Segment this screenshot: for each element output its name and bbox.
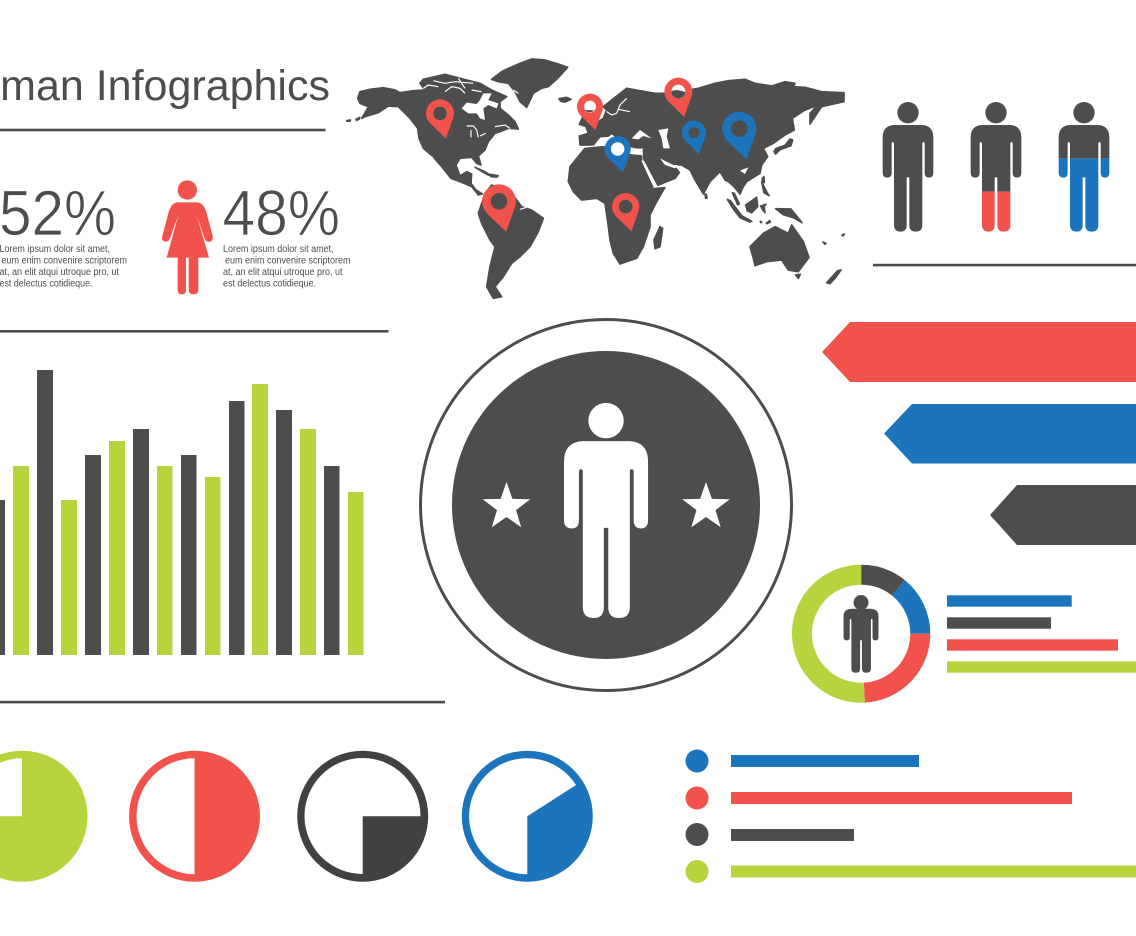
pin: South America [482, 184, 516, 232]
pin: North Africa [605, 136, 631, 172]
arrow: dark [990, 485, 1136, 545]
arrow: blue [884, 404, 1136, 464]
legend row: green [686, 860, 1136, 883]
pie: red [129, 751, 260, 882]
bar chart [0, 370, 364, 655]
text block: right description [223, 244, 350, 290]
legend row: red [686, 786, 1072, 810]
donut chart [802, 575, 920, 693]
pie: blue [462, 751, 593, 882]
pin: Europe [577, 94, 603, 130]
icon: man with blue lower body [1059, 102, 1109, 232]
pin: Russia [664, 78, 692, 117]
legend row: blue [686, 750, 919, 772]
world map [347, 59, 844, 298]
pin: Central Africa [612, 193, 639, 231]
stat: 48 percent [222, 177, 350, 290]
map seas [462, 93, 748, 187]
stat: 52 percent: 52% [0, 177, 116, 249]
map rivers and channels [423, 78, 667, 209]
text block: left description: at, an elit atqui utroque pro, ut [0, 267, 119, 278]
icons: three men [883, 102, 1109, 232]
text block: left description: Lorem ipsum dolor sit amet, [0, 244, 110, 255]
icon: right star [682, 482, 730, 527]
text block: right description: est delectus cotidieque. [223, 278, 316, 290]
text block: left description [0, 244, 127, 290]
text block: right description: eum enim convenire scriptorem [225, 256, 350, 266]
legend list [686, 750, 1136, 883]
text block: right description: at, an elit atqui utroque pro, ut [223, 267, 343, 278]
text block: left description: eum enim convenire scriptorem [2, 256, 127, 266]
icon: woman [162, 180, 213, 294]
arrow: red [822, 322, 1136, 382]
icon: donut man [844, 595, 878, 673]
icon: man with red legs [971, 102, 1021, 232]
central badge [420, 320, 792, 690]
pin: Central Asia [682, 121, 706, 154]
icon: central man [564, 403, 648, 618]
map land [347, 59, 844, 298]
legend row: dark [686, 823, 854, 846]
pie: dark [297, 751, 428, 882]
pie: green [0, 751, 88, 882]
pin: North America [426, 99, 454, 139]
icon: left star [483, 482, 530, 527]
icon: man dark [883, 102, 933, 232]
stat: 52 percent [0, 177, 127, 290]
text block: right description: Lorem ipsum dolor sit amet, [223, 244, 334, 255]
stat: 48 percent: 48% [222, 177, 340, 249]
text block: left description: est delectus cotidieque. [0, 278, 92, 290]
pin: China [722, 112, 756, 159]
donut legend bars [947, 595, 1136, 673]
